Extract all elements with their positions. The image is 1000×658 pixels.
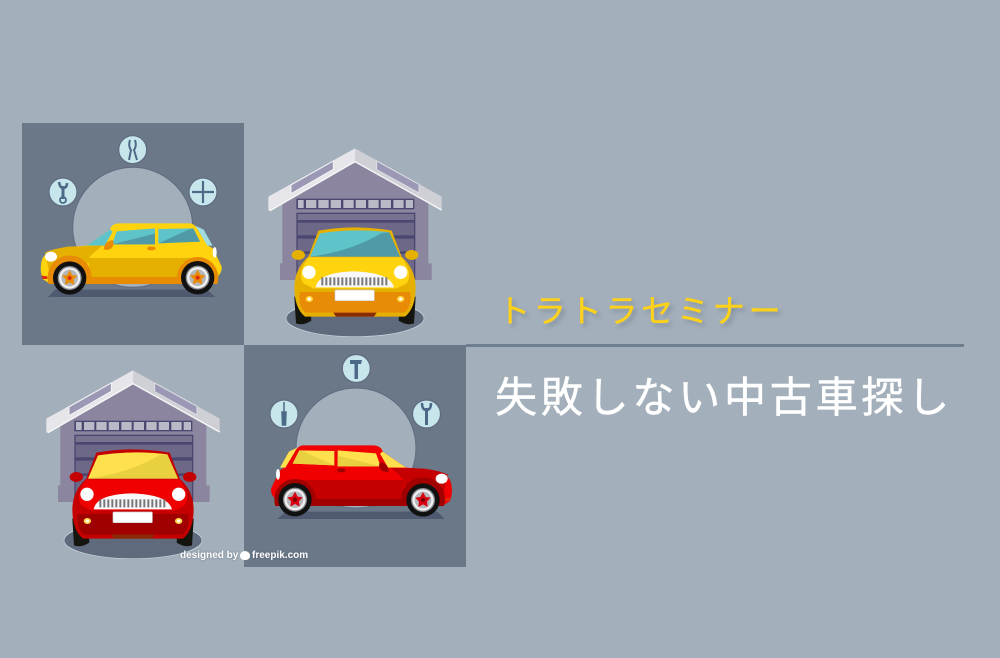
- service arch circle: [296, 388, 416, 508]
- icon: screwdriver: [270, 400, 298, 428]
- heading: seminar name: トラトラセミナー: [498, 293, 784, 329]
- icon: pliers: [119, 136, 147, 164]
- credit text: designed by: [180, 550, 238, 561]
- credit text: [180, 550, 308, 561]
- panel: yellow car in garage: [268, 148, 442, 337]
- car: yellow side view: [41, 223, 222, 297]
- divider line: [466, 344, 964, 347]
- icon: wrench: [412, 400, 440, 428]
- service arch circle: [73, 167, 193, 287]
- panel: red car service square: [244, 345, 466, 567]
- icon: spanner: [49, 178, 77, 206]
- panel: red car in garage: [46, 370, 220, 559]
- icon: cross wrench: [189, 178, 217, 206]
- panel: yellow car service square: [22, 123, 244, 345]
- icon: hammer: [342, 354, 370, 382]
- credit text: freepik.com: [252, 550, 308, 561]
- car: red side view: [271, 445, 452, 519]
- title: main heading: 失敗しない中古車探し: [495, 374, 953, 421]
